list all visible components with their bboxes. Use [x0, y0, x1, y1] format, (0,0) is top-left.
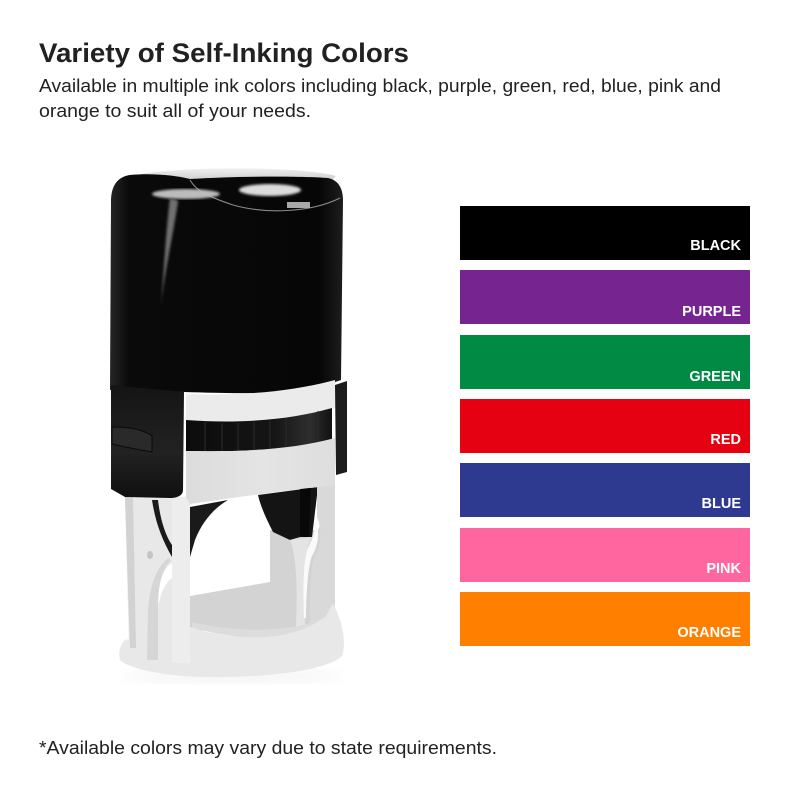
clip button — [112, 427, 152, 452]
description text: Available in multiple ink colors including black, purple, green, red, blue, pink and — [39, 75, 721, 96]
right pillar — [310, 484, 335, 626]
swatch: green: GREEN — [689, 369, 741, 385]
right black clip — [335, 381, 347, 475]
stamp product illustration — [110, 168, 347, 683]
swatch: black — [460, 206, 750, 260]
swatch: pink: PINK — [706, 561, 742, 577]
left black arch — [190, 500, 228, 557]
lever white gap — [155, 563, 172, 604]
cap highlights — [152, 189, 220, 199]
light collar — [186, 380, 335, 422]
inner light strut — [290, 537, 312, 630]
swatch: purple — [460, 270, 750, 324]
swatch: orange: ORANGE — [677, 625, 741, 641]
swatch: black: BLACK — [690, 238, 742, 254]
left black clip — [111, 385, 184, 498]
swatch: purple: PURPLE — [682, 304, 741, 320]
front pillar — [172, 497, 190, 663]
rear black ink mechanism — [258, 487, 318, 540]
color swatches — [460, 206, 750, 646]
swatch: blue: BLUE — [702, 496, 741, 512]
swatch: pink — [460, 528, 750, 582]
cap top lid edge — [190, 180, 340, 211]
soft shadow — [122, 669, 342, 683]
title: Variety of Self-Inking Colors — [39, 38, 409, 68]
footnote: *Available colors may vary due to state requirements. — [39, 737, 497, 758]
description text — [39, 75, 721, 121]
swatch: red — [460, 399, 750, 453]
rear wall and floor — [190, 490, 335, 634]
grey band — [186, 438, 335, 504]
cap top rim — [135, 168, 336, 182]
base ring — [119, 603, 344, 677]
left leg assembly — [125, 497, 190, 664]
cap body — [110, 174, 343, 393]
lever dark curve — [152, 500, 172, 557]
dial ridges — [205, 411, 318, 451]
black dial — [186, 408, 332, 451]
description text: orange to suit all of your needs. — [39, 100, 311, 121]
swatch: red: RED — [710, 432, 741, 448]
inner opening highlight — [303, 517, 318, 618]
swatch: blue — [460, 463, 750, 517]
lever shading — [147, 558, 171, 660]
swatch: orange — [460, 592, 750, 646]
swatch: green — [460, 335, 750, 389]
